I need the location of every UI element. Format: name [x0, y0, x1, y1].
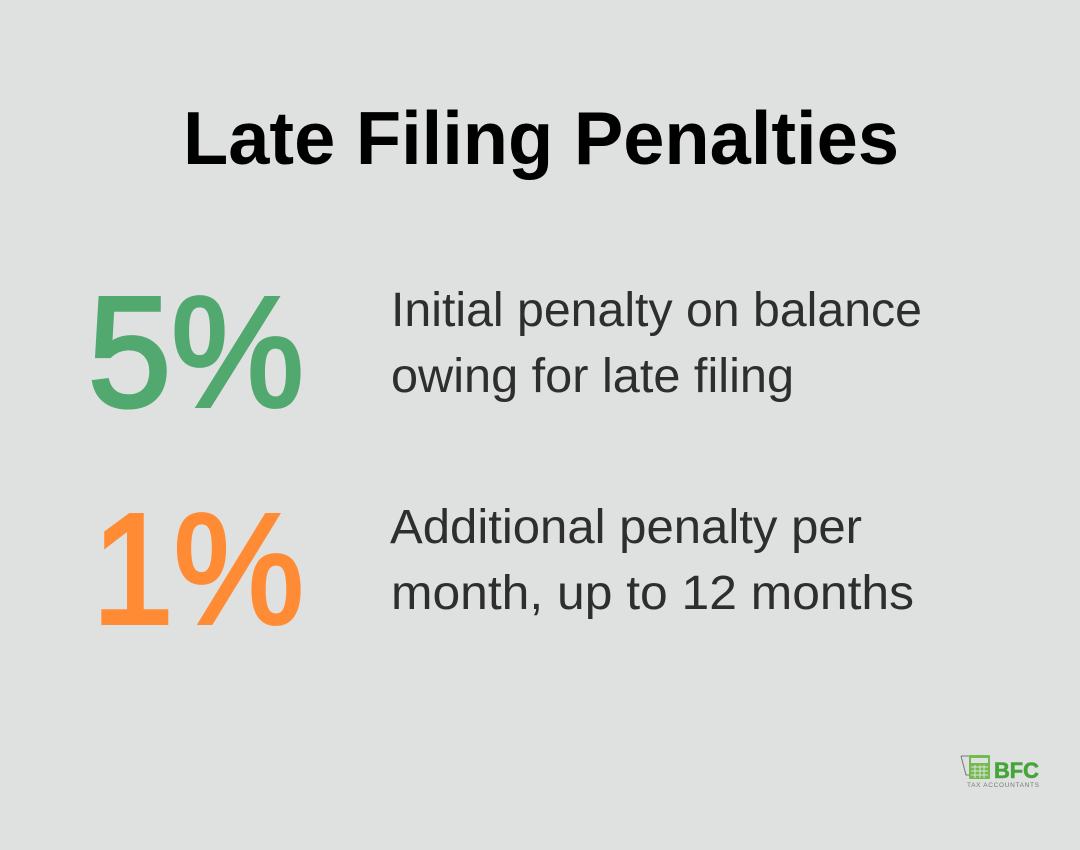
description: initial penalty: Initial penalty on balance: [391, 284, 922, 337]
title: Late Filing Penalties: [183, 96, 899, 180]
stat: 5 percent: 5%: [88, 265, 304, 440]
description: additional penalty: Additional penalty per: [390, 501, 862, 554]
description: initial penalty: owing for late filing: [391, 350, 794, 403]
logo tagline: TAX ACCOUNTANTS: [967, 782, 1040, 789]
logo: BFC Tax Accountants: [961, 755, 1040, 789]
stat: 1 percent: 1%: [92, 482, 304, 657]
description: additional penalty: [390, 501, 914, 620]
logo wordmark: BFC: [994, 758, 1039, 783]
description: initial penalty: [391, 284, 922, 403]
icon: calculator: [961, 755, 990, 779]
description: additional penalty: month, up to 12 months: [391, 567, 914, 620]
